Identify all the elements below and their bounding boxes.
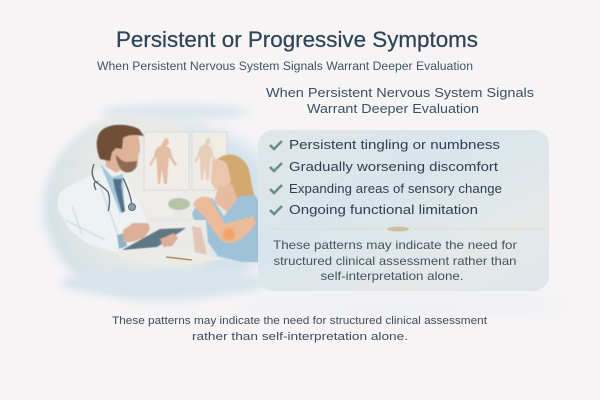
secondary heading: Warrant Deeper Evaluation: [307, 102, 479, 116]
watercolor wash: [47, 104, 570, 317]
list text: Ongoing functional limitation: [289, 202, 478, 217]
lower wash fading over the figures: [60, 269, 270, 297]
panel note: self-interpretation alone.: [320, 269, 464, 283]
doctor hair: [97, 125, 144, 161]
patient face: [211, 159, 231, 190]
list text: Gradually worsening discomfort: [289, 159, 498, 174]
panel background: [258, 130, 549, 291]
shelf: [150, 218, 192, 222]
desk papers: [113, 248, 222, 267]
panel note: structured clinical assessment rather than: [274, 254, 516, 268]
footer note: [112, 315, 487, 343]
clipboard: [122, 228, 186, 250]
stethoscope: [92, 164, 132, 211]
doctor hand and sleeve: [117, 233, 127, 249]
patient shirt: [192, 195, 261, 262]
panel note: [273, 238, 517, 283]
footer note: rather than self-interpretation alone.: [192, 331, 408, 343]
list text: Persistent tingling or numbness: [289, 137, 500, 152]
doctor beard: [116, 155, 137, 172]
patient arms: [193, 196, 256, 243]
pain highlight: [223, 228, 235, 240]
secondary heading: [266, 86, 534, 116]
panel: symptoms: [258, 130, 549, 291]
list text: Expanding areas of sensory change: [289, 181, 502, 196]
secondary heading: When Persistent Nervous System Signals: [266, 86, 534, 100]
title: Persistent or Progressive Symptoms: [116, 27, 478, 52]
check icons: [270, 141, 282, 214]
panel note: These patterns may indicate the need for: [273, 238, 517, 252]
backdrop circle: [46, 114, 228, 296]
checklist: [270, 137, 502, 217]
doctor shirt and tie: [100, 163, 124, 213]
patient hair back: [213, 154, 257, 204]
anatomy posters: [144, 132, 227, 190]
doctor coat: [58, 164, 148, 252]
plant: [168, 198, 190, 219]
ornament divider: [272, 227, 544, 231]
footer note: These patterns may indicate the need for structured clinical assessment: [112, 315, 487, 327]
illustration: doctor and patient: [46, 114, 270, 297]
subtitle: When Persistent Nervous System Signals Warrant Deeper Evaluation: [97, 61, 473, 73]
doctor neck and face: [104, 134, 140, 173]
patient neck: [214, 184, 238, 214]
list text: [289, 137, 502, 217]
